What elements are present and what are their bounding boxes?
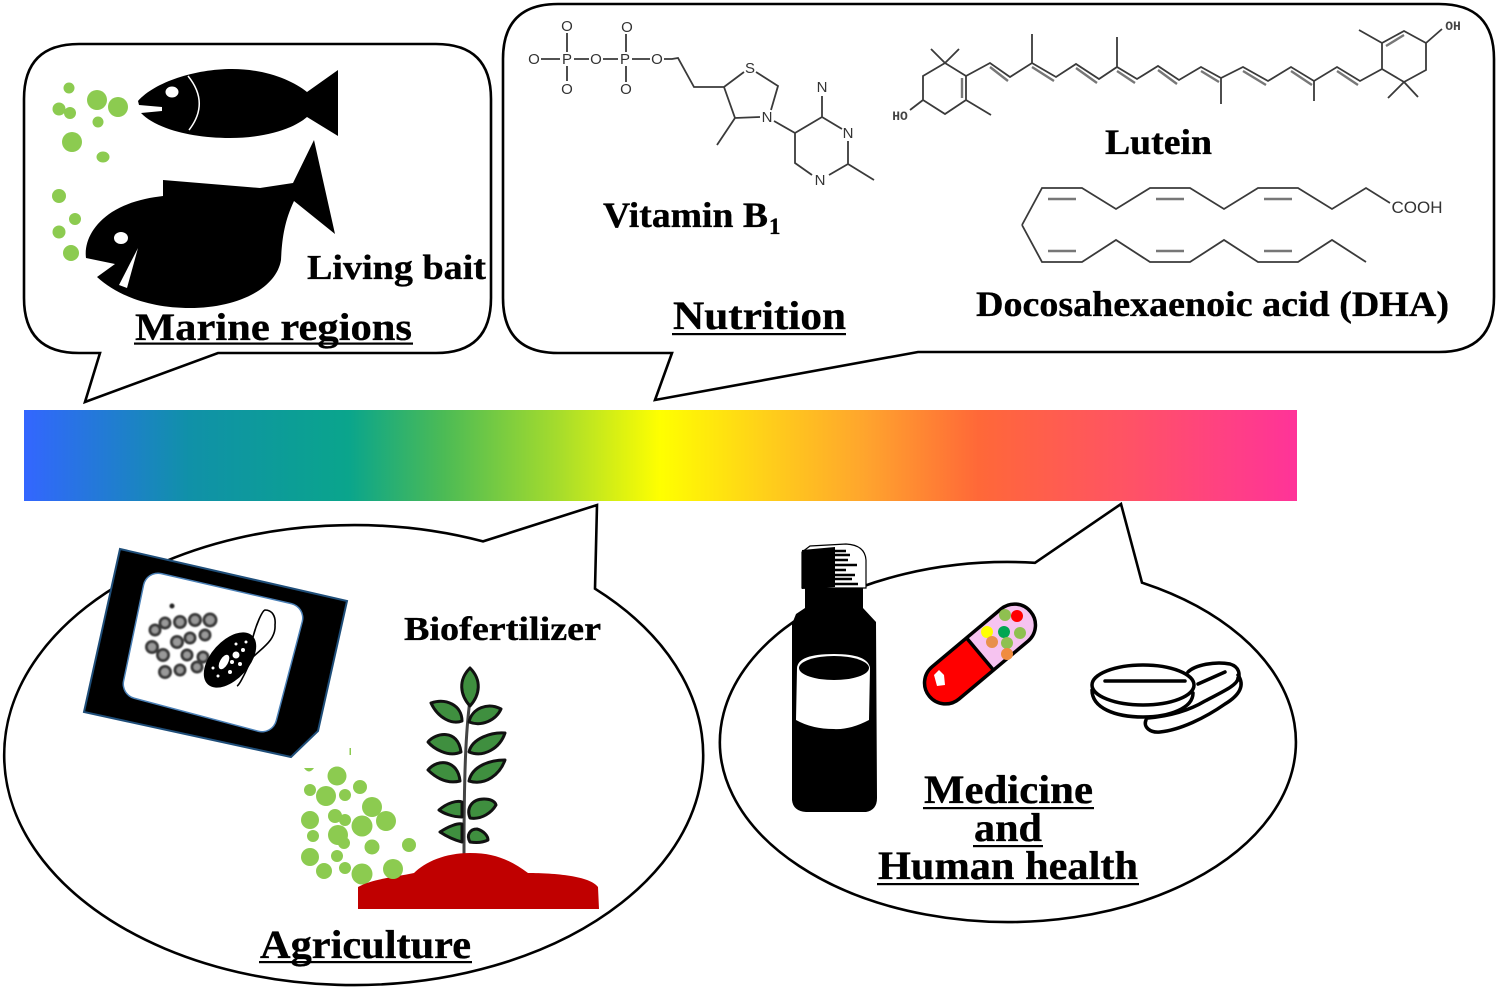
heading: marine regions: Marine regions [135,306,412,349]
panel: marine regions [24,44,491,402]
capsule highlight and dots [934,609,1026,686]
heading: medicine and human health: Medicine [924,767,1093,812]
speech bubble: nutrition [503,4,1494,400]
chemical structure: vitamin B1: O [528,51,540,68]
icon: green biofertilizer dots [301,748,416,884]
icon: medicine bottle [792,544,877,812]
chemical structure: vitamin B1: O [561,18,573,35]
chemical structure: vitamin B1: P [562,51,572,68]
icon: large fish [86,140,335,308]
icon: plant [428,668,505,855]
label: docosahexaenoic acid: Docosahexaenoic acid (DHA) [976,284,1449,324]
chemical structure: vitamin B1: O [561,81,573,98]
icon: capsule [916,595,1044,713]
chemical structure: vitamin B1: S [745,60,755,77]
icon: small fish [138,69,338,138]
icon: red soil mound [358,853,599,909]
speech bubble: medicine [720,504,1296,922]
chemical structure: vitamin B1: N [815,172,825,189]
microalgae cells [146,604,216,678]
chemical structure: lutein: HO [892,109,908,124]
chemical structure: vitamin B1: N [843,125,853,142]
rainbow gradient bar [24,410,1297,501]
label: lutein: Lutein [1105,122,1212,162]
chemical structure: lutein [892,19,1461,124]
icon: green algae dots lower [52,189,81,261]
icon: green algae dots upper [52,82,128,162]
icon: biofertilizer packet [84,549,347,757]
green dot on soil [383,859,403,879]
chemical structure: vitamin B1 [528,18,874,189]
chemical structure: vitamin B1: O [651,51,663,68]
label: biofertilizer: Biofertilizer [404,611,601,648]
chemical structure: vitamin B1: N [762,109,772,126]
label: living bait: Living bait [307,248,486,287]
heading: agriculture: Agriculture [260,922,471,967]
chemical structure: vitamin B1: P [620,51,630,68]
chemical structure: vitamin B1: N [817,79,827,96]
chemical structure: vitamin B1: O [620,81,632,98]
speech bubble: marine regions [24,44,491,402]
chemical structure: DHA [1022,188,1442,262]
panel: medicine and human health [720,504,1296,922]
chemical structure: vitamin B1: O [590,51,602,68]
label: vitamin B1: 1 [769,214,780,239]
chemical structure: DHA: COOH [1392,198,1442,217]
panel: nutrition [503,4,1494,400]
heading: medicine and human health: Human health [878,843,1138,888]
heading: medicine and human health [877,767,1139,888]
chemical structure: lutein: OH [1445,19,1461,34]
speech bubble: agriculture [4,505,703,985]
heading: medicine and human health: and [974,805,1042,850]
icon: tablets [1092,663,1241,732]
heading: nutrition: Nutrition [673,293,846,338]
label: vitamin B1: Vitamin B [603,195,768,235]
panel: agriculture [4,505,703,985]
chemical structure: vitamin B1: O [621,19,633,36]
